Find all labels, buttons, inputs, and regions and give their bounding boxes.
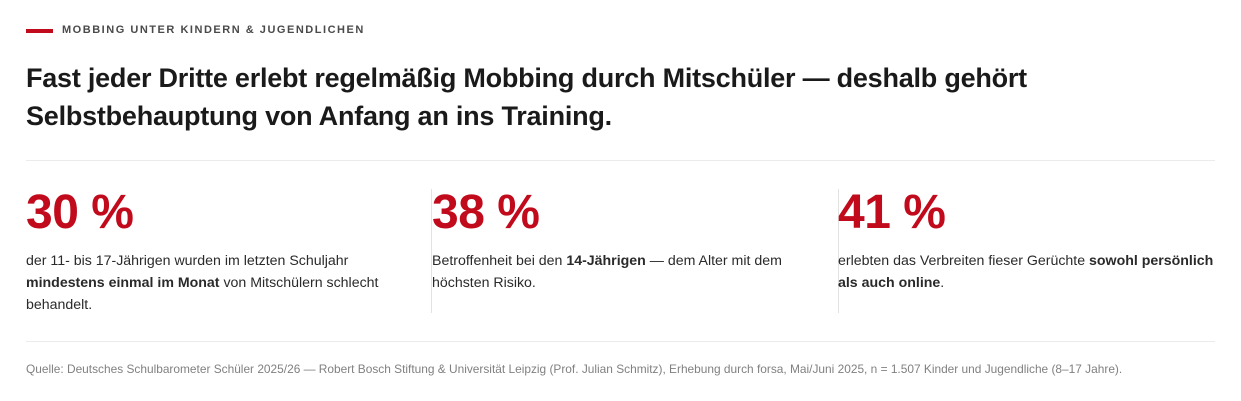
column divider 2 — [838, 189, 839, 313]
stat number 30 percent: 30 % — [26, 186, 133, 239]
stat description 2: Betroffenheit bei den 14-Jährigen — dem Alter mit dem — [432, 253, 782, 269]
panel: stat 41 percent — [838, 186, 1213, 291]
panel: stat 30 percent — [26, 186, 378, 313]
stat description 3: erlebten das Verbreiten fieser Gerüchte sowohl persönlich — [838, 253, 1213, 269]
eyebrow accent bar — [26, 29, 53, 33]
stat description 3 — [838, 253, 1213, 291]
stat description 2: höchsten Risiko. — [432, 275, 536, 291]
title — [26, 63, 1027, 131]
stat description 1: mindestens einmal im Monat von Mitschülern schlecht — [26, 275, 378, 291]
stat number 38 percent: 38 % — [432, 186, 539, 239]
column divider 1 — [431, 189, 432, 313]
bottom divider — [26, 341, 1215, 342]
stat description 1 — [26, 253, 378, 313]
stat number 41 percent: 41 % — [838, 186, 945, 239]
title: Selbstbehauptung von Anfang an ins Training. — [26, 101, 612, 131]
eyebrow label: MOBBING UNTER KINDERN & JUGENDLICHEN — [62, 24, 365, 36]
panel: stat 38 percent — [432, 186, 782, 291]
stat description 1: der 11- bis 17-Jährigen wurden im letzten Schuljahr — [26, 253, 348, 269]
top divider — [26, 160, 1215, 161]
stat description 1: behandelt. — [26, 297, 92, 313]
stat description 2 — [432, 253, 782, 291]
title: Fast jeder Dritte erlebt regelmäßig Mobbing durch Mitschüler — deshalb gehört — [26, 63, 1027, 93]
source note: Quelle: Deutsches Schulbarometer Schüler 2025/26 — Robert Bosch Stiftung & Universität Leipzig (Prof. Julian Schmitz), Erhebung durch forsa, Mai/Juni 2025, n = 1.507 Kinder und Jugendliche (8–17 Jahre). — [26, 362, 1122, 376]
stat description 3: als auch online. — [838, 275, 944, 291]
